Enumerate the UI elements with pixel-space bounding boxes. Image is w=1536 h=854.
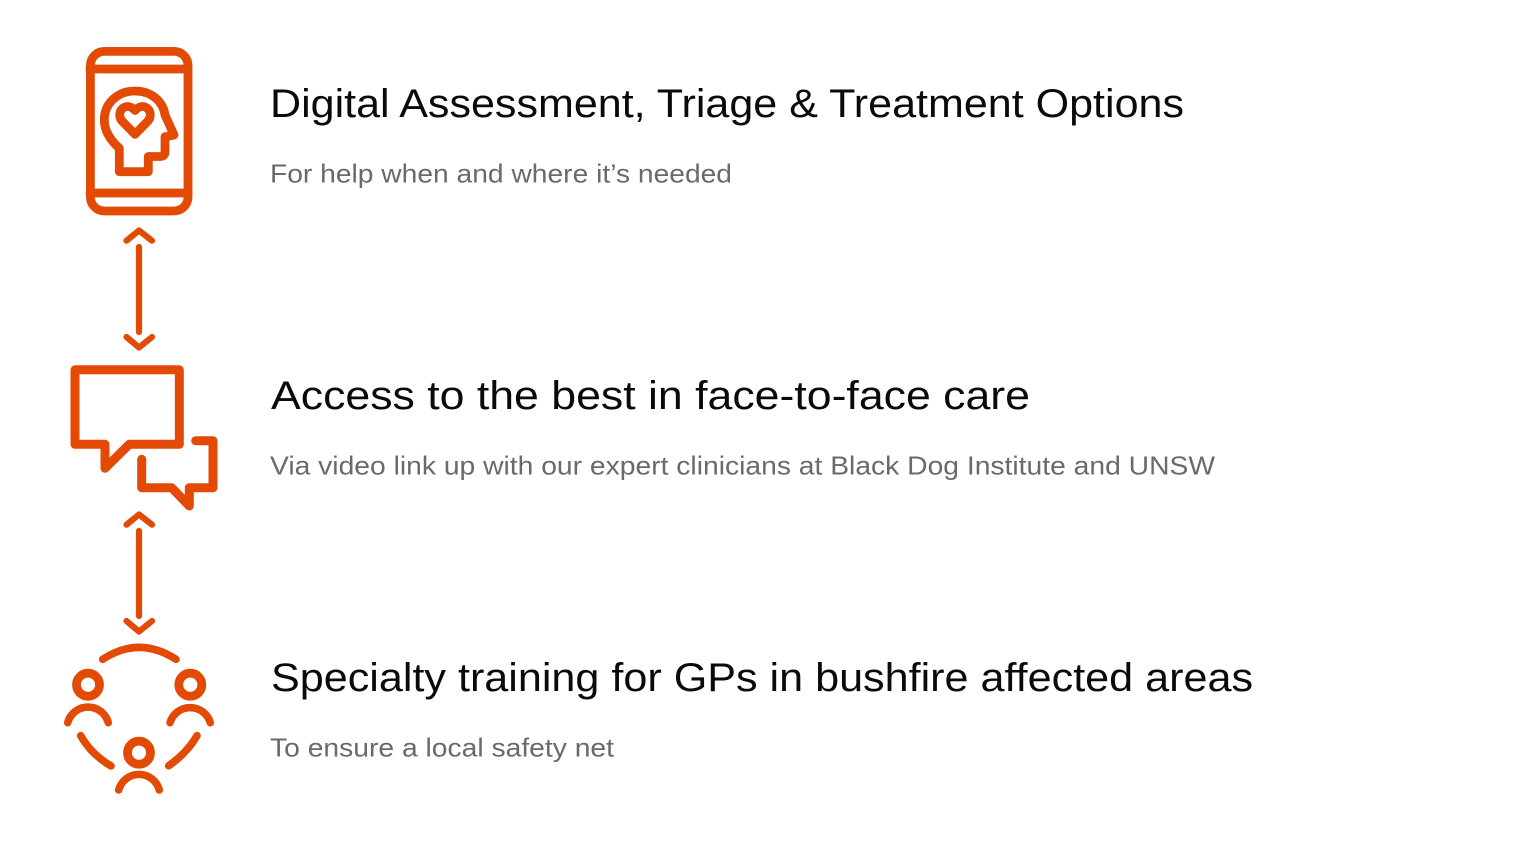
text: specialty training subtitle: To ensure a local safety net [270, 732, 615, 762]
heading: digital assessment: Digital Assessment, Triage & Treatment Options [270, 82, 1184, 126]
icon: chat bubbles [75, 370, 213, 506]
arrow: chat to people [126, 514, 152, 632]
arrow: phone to chat [126, 230, 152, 348]
icon: three people in a circle [68, 647, 210, 790]
text: face-to-face subtitle: Via video link up with our expert clinicians at Black Dog Institute and UNSW [270, 450, 1215, 480]
text: digital assessment subtitle: For help when and where it’s needed [270, 158, 732, 188]
heading: face-to-face care: Access to the best in face-to-face care [271, 374, 1030, 418]
heading: specialty training: Specialty training for GPs in bushfire affected areas [271, 656, 1253, 700]
icon: phone with head and heart [90, 51, 188, 211]
